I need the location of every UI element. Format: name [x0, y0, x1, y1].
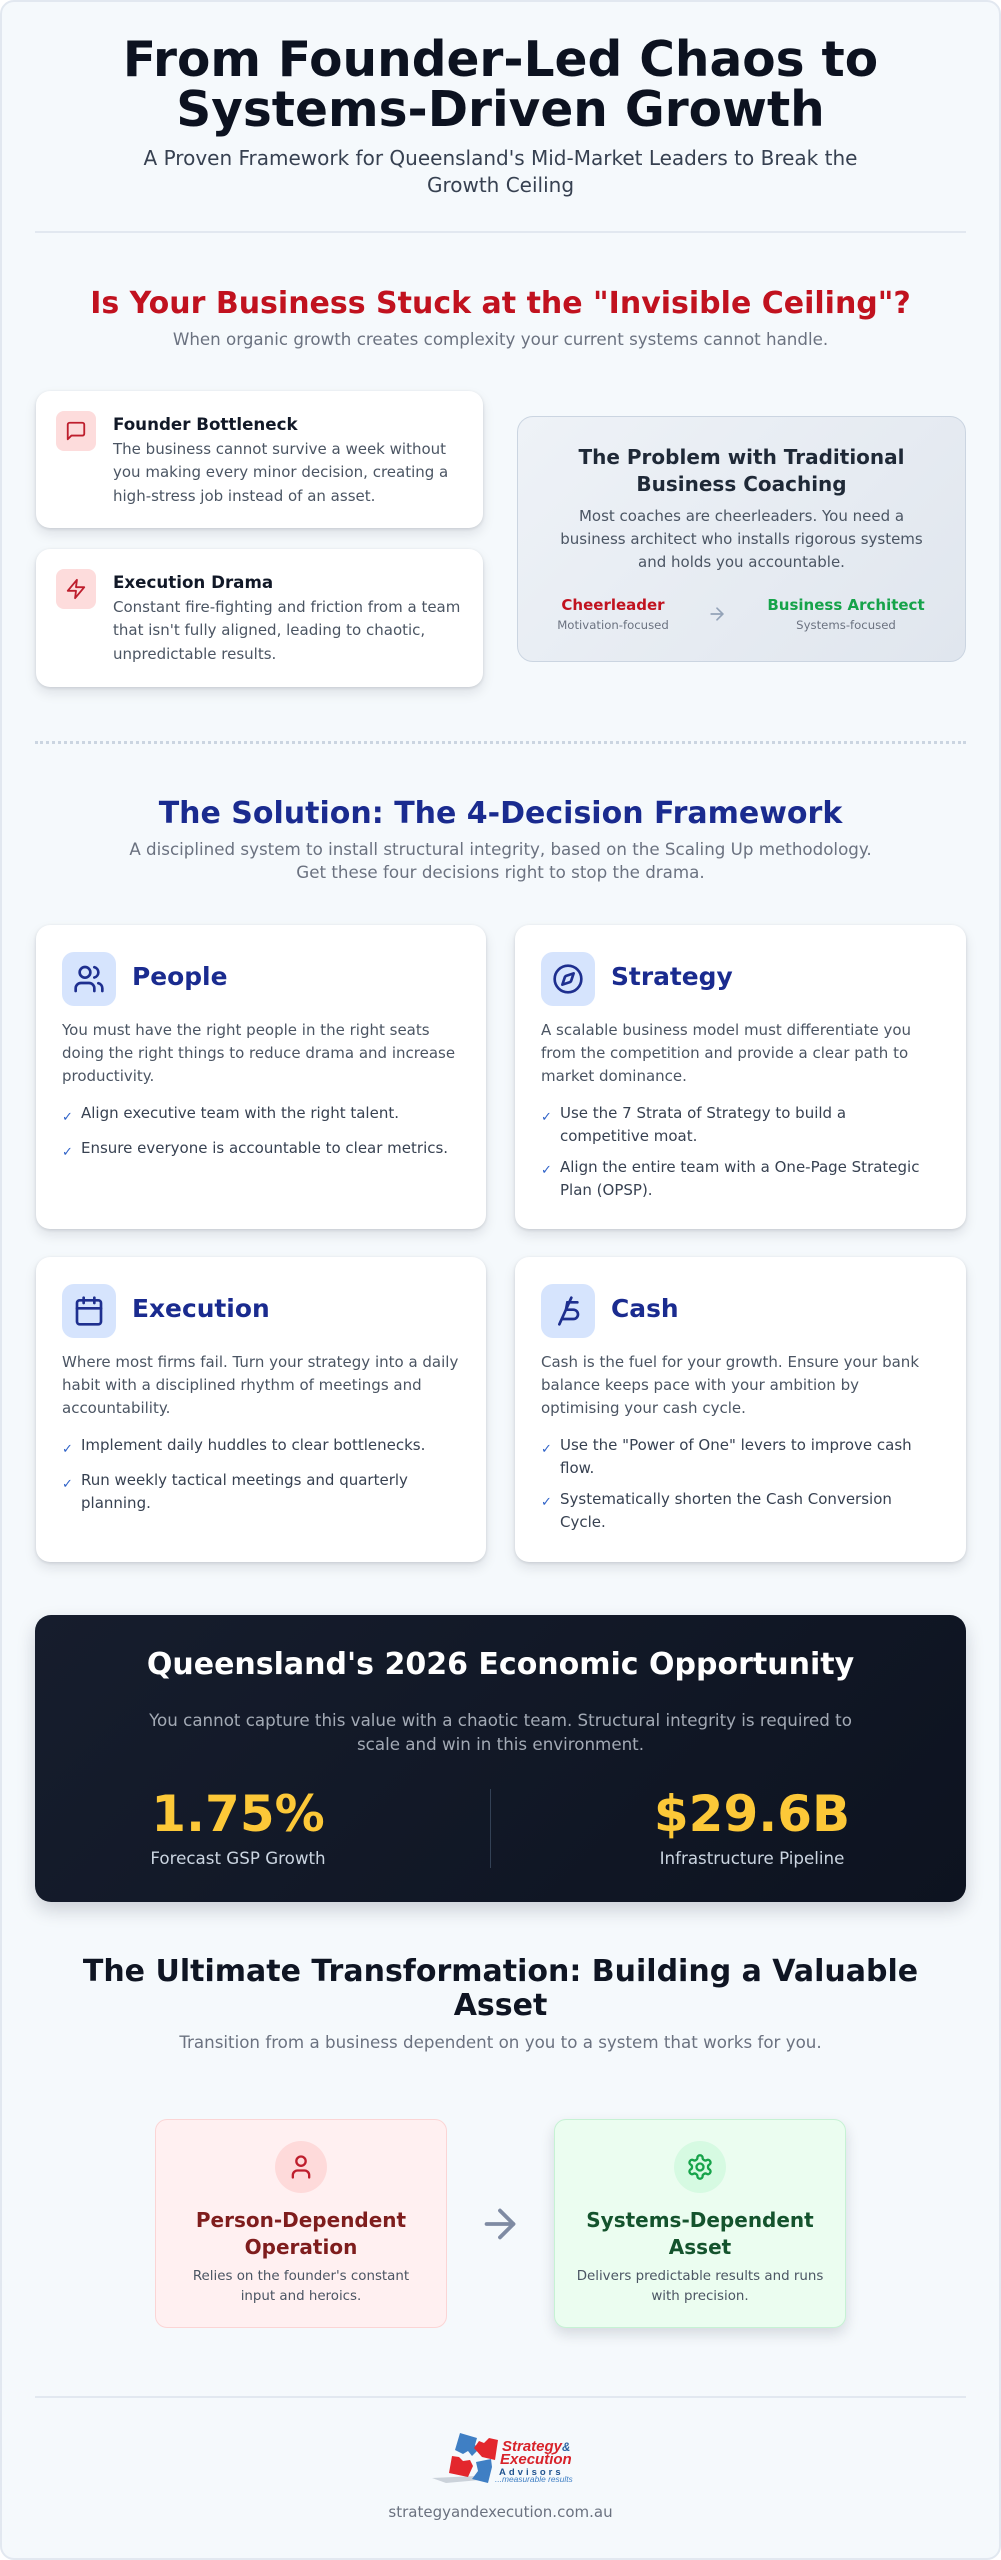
bullet: strategy 1	[560, 1104, 846, 1145]
bullet: execution 2: planning.	[81, 1494, 151, 1512]
panel: cash	[515, 1257, 966, 1562]
bullet: strategy 1: Use the 7 Strata of Strategy to build a	[560, 1104, 846, 1122]
heading: systems-dependent: Asset	[669, 2235, 731, 2259]
text: economic opportunity	[149, 1710, 852, 1754]
comparison: business architect	[767, 596, 925, 632]
check: execution 1: ✓	[62, 1442, 73, 1457]
bullet: strategy 2	[560, 1158, 919, 1199]
text: systems-dependent	[577, 2269, 823, 2304]
text: execution drama: Constant fire-fighting and friction from a team	[113, 598, 460, 616]
text: cash: Cash is the fuel for your growth. Ensure your bank	[541, 1352, 919, 1370]
text: cash: optimising your cash cycle.	[541, 1399, 746, 1417]
icon: person	[275, 2141, 327, 2193]
arrow: transformation	[484, 2208, 516, 2240]
text: traditional coaching: and holds you accountable.	[638, 553, 845, 571]
text: people: doing the right things to reduce drama and increase	[62, 1044, 455, 1062]
icon: compass	[541, 952, 595, 1006]
footer divider	[35, 2396, 966, 2398]
title: From Founder-Led Chaos to	[123, 32, 878, 88]
panel: execution	[36, 1257, 486, 1562]
section subheading: solution	[129, 839, 872, 882]
heading: cash: Cash	[611, 1294, 679, 1323]
heading: strategy: Strategy	[611, 962, 733, 991]
bullet: people 2: Ensure everyone is accountable to clear metrics.	[81, 1139, 448, 1157]
check: strategy 1: ✓	[541, 1110, 552, 1125]
text: traditional coaching: business architect who installs rigorous systems	[560, 530, 923, 548]
header divider	[35, 231, 966, 233]
stat: infrastructure pipeline	[654, 1785, 850, 1868]
text: people	[62, 1020, 455, 1085]
logo: strategy and execution advisors	[432, 2433, 574, 2484]
text: people: You must have the right people in the right seats	[62, 1020, 430, 1038]
panel: person-dependent operation	[155, 2119, 447, 2328]
footer url: strategyandexecution.com.au	[388, 2503, 613, 2521]
icon: gear	[674, 2141, 726, 2193]
comparison: cheerleader: Motivation-focused	[557, 618, 669, 632]
bullet: execution 2	[81, 1471, 408, 1512]
title	[123, 32, 878, 138]
text: strategy: from the competition and provide a clear path to	[541, 1044, 908, 1062]
stat: gsp growth: 1.75%	[151, 1785, 325, 1843]
text: strategy	[541, 1020, 911, 1085]
icon: calendar	[62, 1284, 116, 1338]
heading: traditional coaching	[578, 445, 905, 496]
icon: people	[62, 952, 116, 1006]
title: Systems-Driven Growth	[176, 82, 825, 138]
subtitle	[144, 146, 857, 197]
text: person-dependent: Relies on the founder's constant	[193, 2269, 409, 2284]
section subheading: invisible ceiling: When organic growth creates complexity your current systems cannot handle.	[173, 328, 828, 348]
section subheading: solution: A disciplined system to install structural integrity, based on the Scaling Up methodology.	[129, 839, 872, 859]
stat: gsp growth: Forecast GSP Growth	[150, 1848, 326, 1868]
logo: strategy and execution advisors: Advisors	[499, 2467, 564, 2478]
section subheading: solution: Get these four decisions right to stop the drama.	[296, 862, 705, 882]
logo: strategy and execution advisors: Strategy&	[502, 2438, 570, 2455]
text: execution drama: that isn't fully aligned, leading to chaotic,	[113, 621, 425, 639]
heading: systems-dependent	[586, 2208, 814, 2259]
text: execution: accountability.	[62, 1399, 170, 1417]
heading: people: People	[132, 962, 227, 991]
bullet: people 1: Align executive team with the right talent.	[81, 1104, 399, 1122]
text: economic opportunity: scale and win in this environment.	[357, 1734, 644, 1754]
text: person-dependent: input and heroics.	[241, 2289, 361, 2304]
check: cash 1: ✓	[541, 1442, 552, 1457]
panel: traditional coaching problem	[517, 416, 966, 662]
bullet: strategy 1: competitive moat.	[560, 1127, 697, 1145]
panel: people	[36, 925, 486, 1229]
bullet: cash 1: Use the "Power of One" levers to improve cash	[560, 1436, 912, 1454]
bullet: cash 2: Cycle.	[560, 1513, 606, 1531]
text: cash: balance keeps pace with your ambition by	[541, 1376, 859, 1394]
text: execution	[62, 1352, 458, 1417]
text: cash	[541, 1352, 919, 1417]
icon: message square	[56, 411, 96, 451]
stat: infrastructure pipeline: Infrastructure Pipeline	[660, 1848, 844, 1868]
text: founder bottleneck: high-stress job instead of an asset.	[113, 487, 375, 505]
text: founder bottleneck: you making every minor decision, creating a	[113, 463, 448, 481]
bullet: strategy 2: Align the entire team with a One-Page Strategic	[560, 1158, 919, 1176]
dotted divider	[35, 741, 966, 744]
bullet: execution 1: Implement daily huddles to clear bottlenecks.	[81, 1436, 425, 1454]
text: traditional coaching	[560, 506, 923, 571]
bullet: cash 1	[560, 1436, 912, 1477]
text: founder bottleneck	[112, 440, 448, 505]
check: cash 2: ✓	[541, 1495, 552, 1510]
text: strategy: market dominance.	[541, 1067, 687, 1085]
text: execution: habit with a disciplined rhythm of meetings and	[62, 1376, 422, 1394]
bullet: strategy 2: Plan (OPSP).	[560, 1181, 653, 1199]
stat: infrastructure pipeline: $29.6B	[654, 1785, 850, 1843]
heading: economic opportunity: Queensland's 2026 Economic Opportunity	[147, 1646, 854, 1682]
check: people 2: ✓	[62, 1145, 73, 1160]
text: person-dependent	[193, 2269, 409, 2304]
heading: person-dependent: Person-Dependent	[196, 2208, 406, 2232]
section subheading: transformation: Transition from a business dependent on you to a system that works for you.	[179, 2032, 822, 2052]
panel: economic opportunity	[35, 1615, 966, 1902]
subtitle: A Proven Framework for Queensland's Mid-Market Leaders to Break the	[144, 146, 857, 170]
logo: strategy and execution advisors: Execution	[500, 2451, 572, 2468]
text: execution drama: unpredictable results.	[113, 645, 276, 663]
bullet: cash 2	[560, 1490, 892, 1531]
comparison: cheerleader	[557, 596, 669, 632]
text: founder bottleneck: The business cannot survive a week without	[113, 440, 446, 458]
text: execution drama	[113, 598, 460, 663]
panel: founder bottleneck	[36, 391, 483, 528]
comparison: business architect: Business Architect	[767, 596, 925, 614]
section heading: invisible ceiling: Is Your Business Stuck at the "Invisible Ceiling"?	[90, 286, 911, 321]
heading: person-dependent	[196, 2208, 406, 2259]
logo: strategy and execution advisors: ...measurable results	[495, 2474, 574, 2484]
check: people 1: ✓	[62, 1110, 73, 1125]
text: people: productivity.	[62, 1067, 154, 1085]
panel: execution drama	[36, 549, 483, 687]
comparison: cheerleader: Cheerleader	[561, 596, 665, 614]
bullet: cash 2: Systematically shorten the Cash Conversion	[560, 1490, 892, 1508]
text: strategy: A scalable business model must differentiate you	[541, 1020, 911, 1038]
heading: person-dependent: Operation	[245, 2235, 357, 2259]
section heading: transformation	[83, 1954, 918, 2023]
section heading: transformation: The Ultimate Transformation: Building a Valuable	[83, 1954, 918, 1989]
heading: execution: Execution	[132, 1294, 270, 1323]
subtitle: Growth Ceiling	[427, 173, 574, 197]
icon: comparison arrow	[710, 607, 724, 621]
stat divider	[490, 1789, 491, 1868]
comparison: business architect: Systems-focused	[796, 618, 896, 632]
section heading: solution: The Solution: The 4-Decision Framework	[159, 796, 842, 831]
text: execution: Where most firms fail. Turn your strategy into a daily	[62, 1352, 458, 1370]
icon: cash	[541, 1284, 595, 1338]
panel: systems-dependent asset	[554, 2119, 846, 2328]
check: strategy 2: ✓	[541, 1163, 552, 1178]
text: systems-dependent: with precision.	[651, 2289, 749, 2304]
heading: traditional coaching: Business Coaching	[636, 472, 847, 496]
bullet: execution 2: Run weekly tactical meetings and quarterly	[81, 1471, 408, 1489]
section heading: transformation: Asset	[454, 1988, 547, 2023]
bullet: cash 1: flow.	[560, 1459, 594, 1477]
heading: traditional coaching: The Problem with Traditional	[578, 445, 905, 469]
text: systems-dependent: Delivers predictable results and runs	[577, 2269, 823, 2284]
stat: gsp growth	[150, 1785, 326, 1868]
icon: lightning bolt	[56, 569, 96, 609]
check: execution 2: ✓	[62, 1477, 73, 1492]
text: traditional coaching: Most coaches are cheerleaders. You need a	[579, 506, 904, 524]
heading: founder bottleneck: Founder Bottleneck	[113, 414, 298, 434]
heading: systems-dependent: Systems-Dependent	[586, 2208, 814, 2232]
panel: strategy	[515, 925, 966, 1229]
heading: execution drama: Execution Drama	[113, 572, 273, 592]
text: economic opportunity: You cannot capture this value with a chaotic team. Structural integrity is required to	[149, 1710, 852, 1730]
